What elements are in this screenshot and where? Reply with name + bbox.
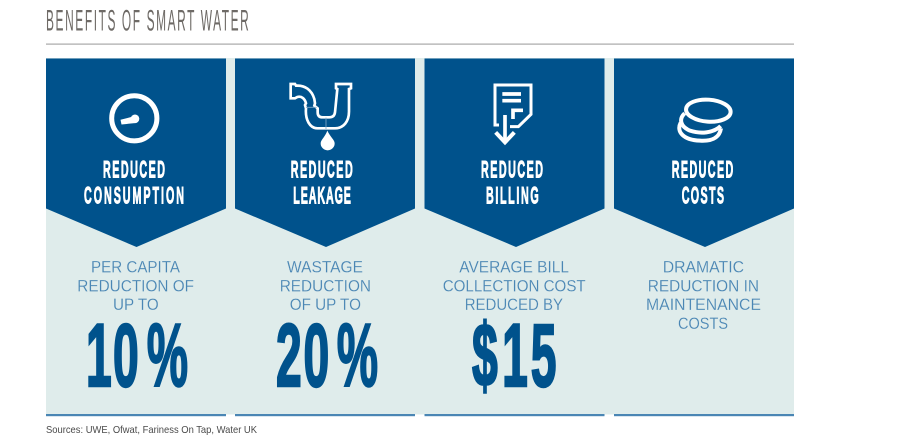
bottom rule bbox=[235, 414, 415, 416]
description: WASTAGE bbox=[287, 258, 363, 277]
description bbox=[77, 258, 194, 314]
panel: reduced billing bbox=[424, 58, 604, 416]
description: COSTS bbox=[678, 314, 728, 333]
panel: reduced consumption bbox=[46, 58, 226, 416]
description bbox=[443, 258, 586, 314]
big number: $15 bbox=[472, 307, 557, 406]
big number: 20% bbox=[276, 307, 378, 406]
bottom rule bbox=[614, 414, 794, 416]
sources note: Sources: UWE, Ofwat, Fariness On Tap, Water UK bbox=[46, 424, 257, 436]
heading: LEAKAGE bbox=[293, 181, 351, 209]
description: REDUCTION IN bbox=[648, 276, 759, 296]
description bbox=[280, 258, 371, 314]
big number: 10% bbox=[86, 307, 188, 406]
bottom rule bbox=[424, 414, 604, 416]
chevron banner bbox=[424, 58, 604, 247]
heading bbox=[672, 155, 733, 209]
panel: reduced costs bbox=[614, 58, 794, 416]
description: PER CAPITA bbox=[91, 258, 181, 277]
heading: BILLING bbox=[486, 181, 539, 209]
description: AVERAGE BILL bbox=[459, 258, 569, 277]
chevron banner bbox=[46, 58, 226, 247]
icon: leaking pipe bbox=[291, 84, 351, 150]
heading bbox=[481, 155, 543, 209]
description: UP TO bbox=[113, 295, 159, 314]
panel: reduced leakage bbox=[235, 58, 415, 416]
heading: REDUCED bbox=[481, 155, 543, 183]
description bbox=[646, 258, 761, 333]
description: MAINTENANCE bbox=[646, 295, 761, 314]
heading bbox=[84, 155, 184, 209]
description: REDUCTION OF bbox=[77, 276, 194, 296]
light background band bbox=[46, 58, 794, 414]
title: BENEFITS OF SMART WATER bbox=[46, 3, 249, 37]
chevron banner bbox=[614, 58, 794, 247]
heading: COSTS bbox=[682, 181, 724, 209]
description: REDUCTION bbox=[280, 276, 371, 296]
heading: REDUCED bbox=[291, 155, 353, 183]
icon: bill with down arrow bbox=[495, 85, 531, 142]
chevron banner bbox=[235, 58, 415, 247]
bottom rule bbox=[46, 414, 226, 416]
description: OF UP TO bbox=[290, 295, 361, 314]
heading: CONSUMPTION bbox=[84, 181, 184, 209]
icon: gauge bbox=[112, 96, 157, 141]
heading: REDUCED bbox=[103, 155, 165, 183]
heading bbox=[291, 155, 353, 209]
description: COLLECTION COST bbox=[443, 276, 586, 296]
icon: stacked coins bbox=[679, 98, 731, 141]
heading: REDUCED bbox=[672, 155, 733, 183]
title rule bbox=[46, 44, 794, 45]
description: REDUCED BY bbox=[465, 295, 563, 314]
description: DRAMATIC bbox=[663, 258, 744, 277]
